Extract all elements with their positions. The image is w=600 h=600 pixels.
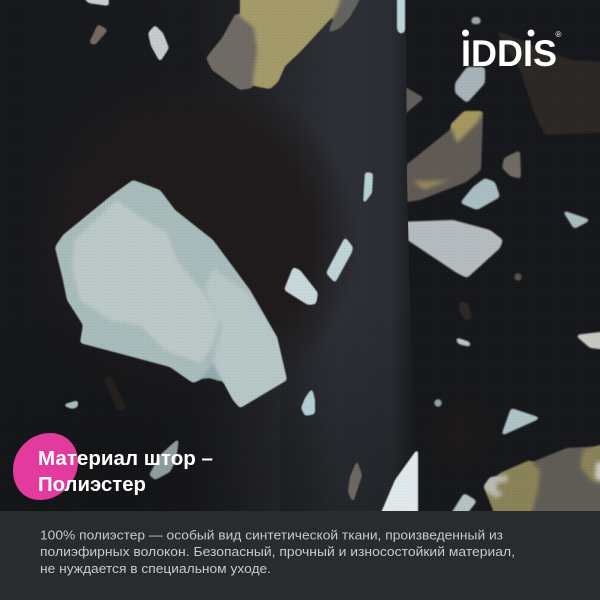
icon: logo i dots xyxy=(462,30,534,36)
icon: pink blob behind heading xyxy=(13,433,78,500)
stone: small brown dot xyxy=(514,273,522,281)
stone: pale pebble under logo xyxy=(455,67,485,103)
stone: taupe half pebble xyxy=(502,150,521,179)
stone: brown oval xyxy=(459,302,472,320)
stone: lighter inner area xyxy=(72,200,219,363)
stone: olive sliver xyxy=(413,180,450,190)
stone: brown sliver xyxy=(89,24,108,45)
stone: blue shadow notch xyxy=(200,363,222,382)
stone: grey beside olive xyxy=(206,13,257,90)
stone: pale chip xyxy=(455,337,471,347)
heading: Полиэстер xyxy=(38,474,146,496)
stone: small teal dot xyxy=(434,399,442,407)
stone: olive mass xyxy=(485,460,540,520)
stone: lighter right area xyxy=(205,268,287,408)
heading: Материал штор – xyxy=(38,448,213,470)
stone: olive xyxy=(240,0,349,89)
text block: description: полиэфирных волокон. Безопасный, прочный и износостойкий материал, xyxy=(40,544,515,559)
stone: small blue shard xyxy=(564,210,589,229)
stone: blue strip at fold edge xyxy=(397,0,405,34)
stones: right curtain shapes xyxy=(400,17,600,520)
stone: white bottom curve xyxy=(378,448,418,520)
text block: description xyxy=(40,528,515,576)
icon: registered mark: ® xyxy=(556,30,562,39)
stone: pale edge chip xyxy=(595,460,600,486)
heading xyxy=(38,448,213,496)
stone: olive right xyxy=(580,442,600,485)
stone: grey top of fold xyxy=(328,0,365,33)
stone: blue shard xyxy=(363,172,373,205)
stone: large pale stone xyxy=(400,220,503,278)
stone: pale blue bottom xyxy=(452,493,476,511)
text block: description: не нуждается в специальном уходе. xyxy=(40,561,271,576)
logo: IDDIS: IDDIS xyxy=(461,33,557,74)
stone: small top chip xyxy=(471,17,481,24)
panel: terrazzo stones on the left curtain fold xyxy=(55,0,418,520)
stone: grey mass xyxy=(530,446,600,511)
panel: terrazzo stones on the right curtain xyxy=(400,17,600,520)
stone: top white shard xyxy=(78,0,109,6)
stone: dark brown large xyxy=(495,30,600,135)
stone: blue pebble xyxy=(460,178,500,210)
stone: pale right edge xyxy=(575,331,600,350)
stone: pale stone base xyxy=(55,180,287,408)
stone: taupe large xyxy=(400,111,483,203)
stone: pale c-shaped chip xyxy=(483,475,508,498)
stone: olive top xyxy=(450,111,483,143)
stone: large pale stone xyxy=(55,180,287,408)
stone: dark brown sliver xyxy=(103,376,127,412)
text block: description: 100% полиэстер — особый вид синтетической ткани, произведенный из xyxy=(40,528,503,542)
stone: white shard xyxy=(148,25,169,62)
stone: blue drop xyxy=(301,388,315,416)
stone: pale blue triangle xyxy=(501,408,541,436)
stone: blue strip xyxy=(326,237,353,283)
stone: pale pebble xyxy=(284,267,318,305)
stone: faint shard under heading xyxy=(149,438,179,480)
stone: grey triangle xyxy=(406,87,423,114)
stone: taupe sliver xyxy=(348,460,362,503)
stone: small teal chip xyxy=(62,400,78,409)
panel: description footer xyxy=(0,511,600,600)
